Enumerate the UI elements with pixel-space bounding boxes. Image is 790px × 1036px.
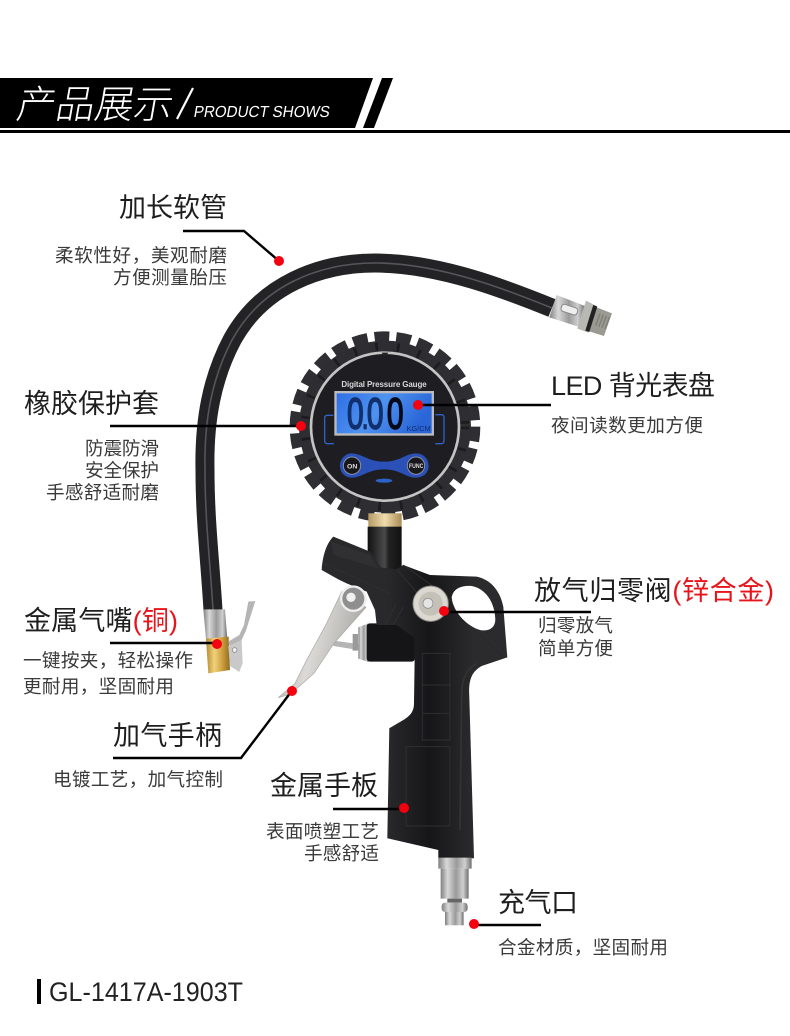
header banner [0,78,790,133]
description: 电镀工艺，加气控制 [53,769,223,790]
label: 金属手板: 金属手板 [270,771,378,801]
description: 归零放气 [538,615,613,636]
lcd reading: 0 [347,389,364,438]
leader line [183,231,279,261]
label: LED 背光表盘: LED 背光表盘 [551,371,715,401]
leader line [110,425,300,427]
model number: GL-1417A-1903T [49,977,243,1007]
gauge rubber guard [296,337,474,516]
marker dot [274,256,284,266]
leader line [110,642,217,644]
marker dot [439,606,449,616]
label: LED 背光表盘 [413,371,715,436]
button: on: ON [347,463,358,470]
rod and nut [333,623,415,662]
pistol handle [322,537,507,858]
description line 2: 安全保护 [85,460,159,481]
label: 金属气嘴: 金属气嘴(铜) [24,606,178,636]
product: air hose [205,263,552,610]
description line 2: 方便测量胎压 [113,267,227,288]
label: 加长软管 [55,193,284,288]
label: 充气口: 充气口 [498,888,578,918]
release valve screw [413,586,448,621]
label: 橡胶保护套 [24,389,306,503]
lcd screen [334,389,434,438]
description: 表面喷塑工艺 [266,821,379,842]
label: 金属手板 [266,771,409,864]
label: 加气手柄 [53,686,297,790]
lcd reading: 0 [367,389,384,438]
product: pistol body [278,527,507,925]
product: hose chuck [203,601,255,673]
description: 防震防滑 [85,438,159,459]
product: digital gauge [296,337,474,530]
description: 一键按夹，轻松操作 [23,650,193,671]
lcd reading: 0 [387,389,404,438]
description line 2: 简单方便 [538,638,613,659]
gauge title: Digital Pressure Gauge [341,380,427,389]
label: 放气归零阀 [439,576,774,659]
label: 加长软管: 加长软管 [119,193,227,223]
heading: 产品展示: 产品展示 [13,83,177,127]
product: hose threaded fitting [549,295,612,336]
button panel [340,453,429,483]
lcd reading: . [362,399,368,437]
heading: product shows: PRODUCT SHOWS [192,103,331,121]
leader line [444,611,591,613]
heading slash [177,88,193,119]
marker dot [296,421,306,431]
lcd unit: KG/CM [407,426,431,433]
marker dot [413,400,423,410]
description line 2: 更耐用，坚固耐用 [23,676,174,697]
leader line [333,808,404,810]
label: 充气口 [469,888,668,958]
leader line [418,404,551,406]
label: 金属气嘴 [23,606,222,697]
leader line [113,692,291,758]
marker dot [287,686,297,696]
trigger lever [278,585,367,698]
description: 柔软性好，美观耐磨 [55,245,227,266]
label: 放气归零阀: 放气归零阀(锌合金) [534,576,774,606]
button: func: FUNC [409,464,424,470]
marker dot [399,803,409,813]
air inlet plug [438,858,472,925]
description: 合金材质，坚固耐用 [498,937,668,958]
leader line [474,924,541,926]
description: 夜间读数更加方便 [551,415,703,436]
marker dot [469,919,479,929]
description line 2: 手感舒适 [304,843,379,864]
label: 橡胶保护套: 橡胶保护套 [24,389,159,419]
label: 加气手柄: 加气手柄 [113,721,222,751]
marker dot [212,639,222,649]
description line 3: 手感舒适耐磨 [46,482,159,503]
